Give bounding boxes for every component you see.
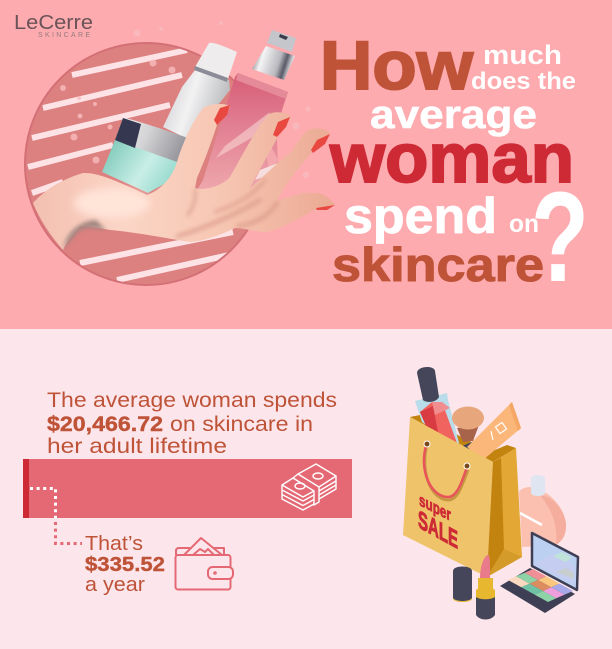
illustration: shopping bag and cosmetics bbox=[403, 367, 578, 620]
dotted connector bbox=[30, 488, 82, 544]
striped circle bbox=[25, 43, 267, 285]
title: average bbox=[370, 93, 537, 137]
title: does the bbox=[471, 68, 576, 95]
icon: money stack bbox=[282, 464, 336, 510]
per-year text: a year bbox=[85, 573, 145, 596]
bag text: SALE bbox=[418, 505, 458, 555]
title bbox=[320, 27, 589, 309]
palm highlight bbox=[74, 188, 150, 218]
lifetime spend text: $20,466.72 bbox=[47, 413, 163, 436]
bag side bbox=[487, 448, 522, 577]
bag back flap bbox=[410, 415, 516, 462]
sparkles bbox=[60, 21, 310, 178]
bag text bbox=[418, 490, 458, 555]
white bottle bbox=[163, 43, 237, 140]
per-year text bbox=[85, 532, 165, 596]
wrist shadow bbox=[63, 220, 106, 250]
header background bbox=[0, 0, 612, 329]
title: on bbox=[509, 210, 539, 238]
hand holding products bbox=[33, 104, 335, 250]
logo: LeCerre Skincare: LeCerre bbox=[14, 12, 93, 34]
title: much bbox=[483, 40, 562, 70]
nails bbox=[214, 105, 335, 210]
title: How bbox=[320, 27, 473, 104]
lipstick bbox=[476, 555, 495, 620]
logo: LeCerre Skincare: SKINCARE bbox=[38, 32, 90, 39]
tall bottle bbox=[415, 367, 459, 447]
pink bottle bbox=[197, 30, 296, 190]
perfume bottle bbox=[519, 475, 566, 547]
lifetime spend text: The average woman spends bbox=[47, 389, 337, 412]
bag front bbox=[403, 417, 493, 577]
bag handle bbox=[424, 441, 470, 500]
makeup brush bbox=[452, 406, 484, 452]
title: ? bbox=[531, 166, 589, 309]
bag text: super bbox=[419, 490, 451, 525]
lower panel background bbox=[0, 329, 612, 649]
lifetime spend text bbox=[47, 389, 337, 458]
title: woman bbox=[329, 119, 574, 197]
teal jar bbox=[102, 118, 190, 193]
title: skincare bbox=[332, 238, 544, 291]
bar: lifetime total bbox=[23, 459, 352, 518]
lifetime spend text: her adult lifetime bbox=[47, 435, 227, 458]
lipstick cap bbox=[453, 566, 472, 602]
finger shading bbox=[178, 180, 277, 236]
compact box bbox=[467, 402, 521, 460]
per-year text: $335.52 bbox=[85, 553, 165, 576]
eyeshadow palette bbox=[500, 533, 578, 613]
lifetime spend text: on skincare in bbox=[170, 413, 313, 436]
icon: wallet bbox=[176, 538, 233, 590]
per-year text: That’s bbox=[85, 532, 143, 555]
title: spend bbox=[344, 188, 497, 244]
